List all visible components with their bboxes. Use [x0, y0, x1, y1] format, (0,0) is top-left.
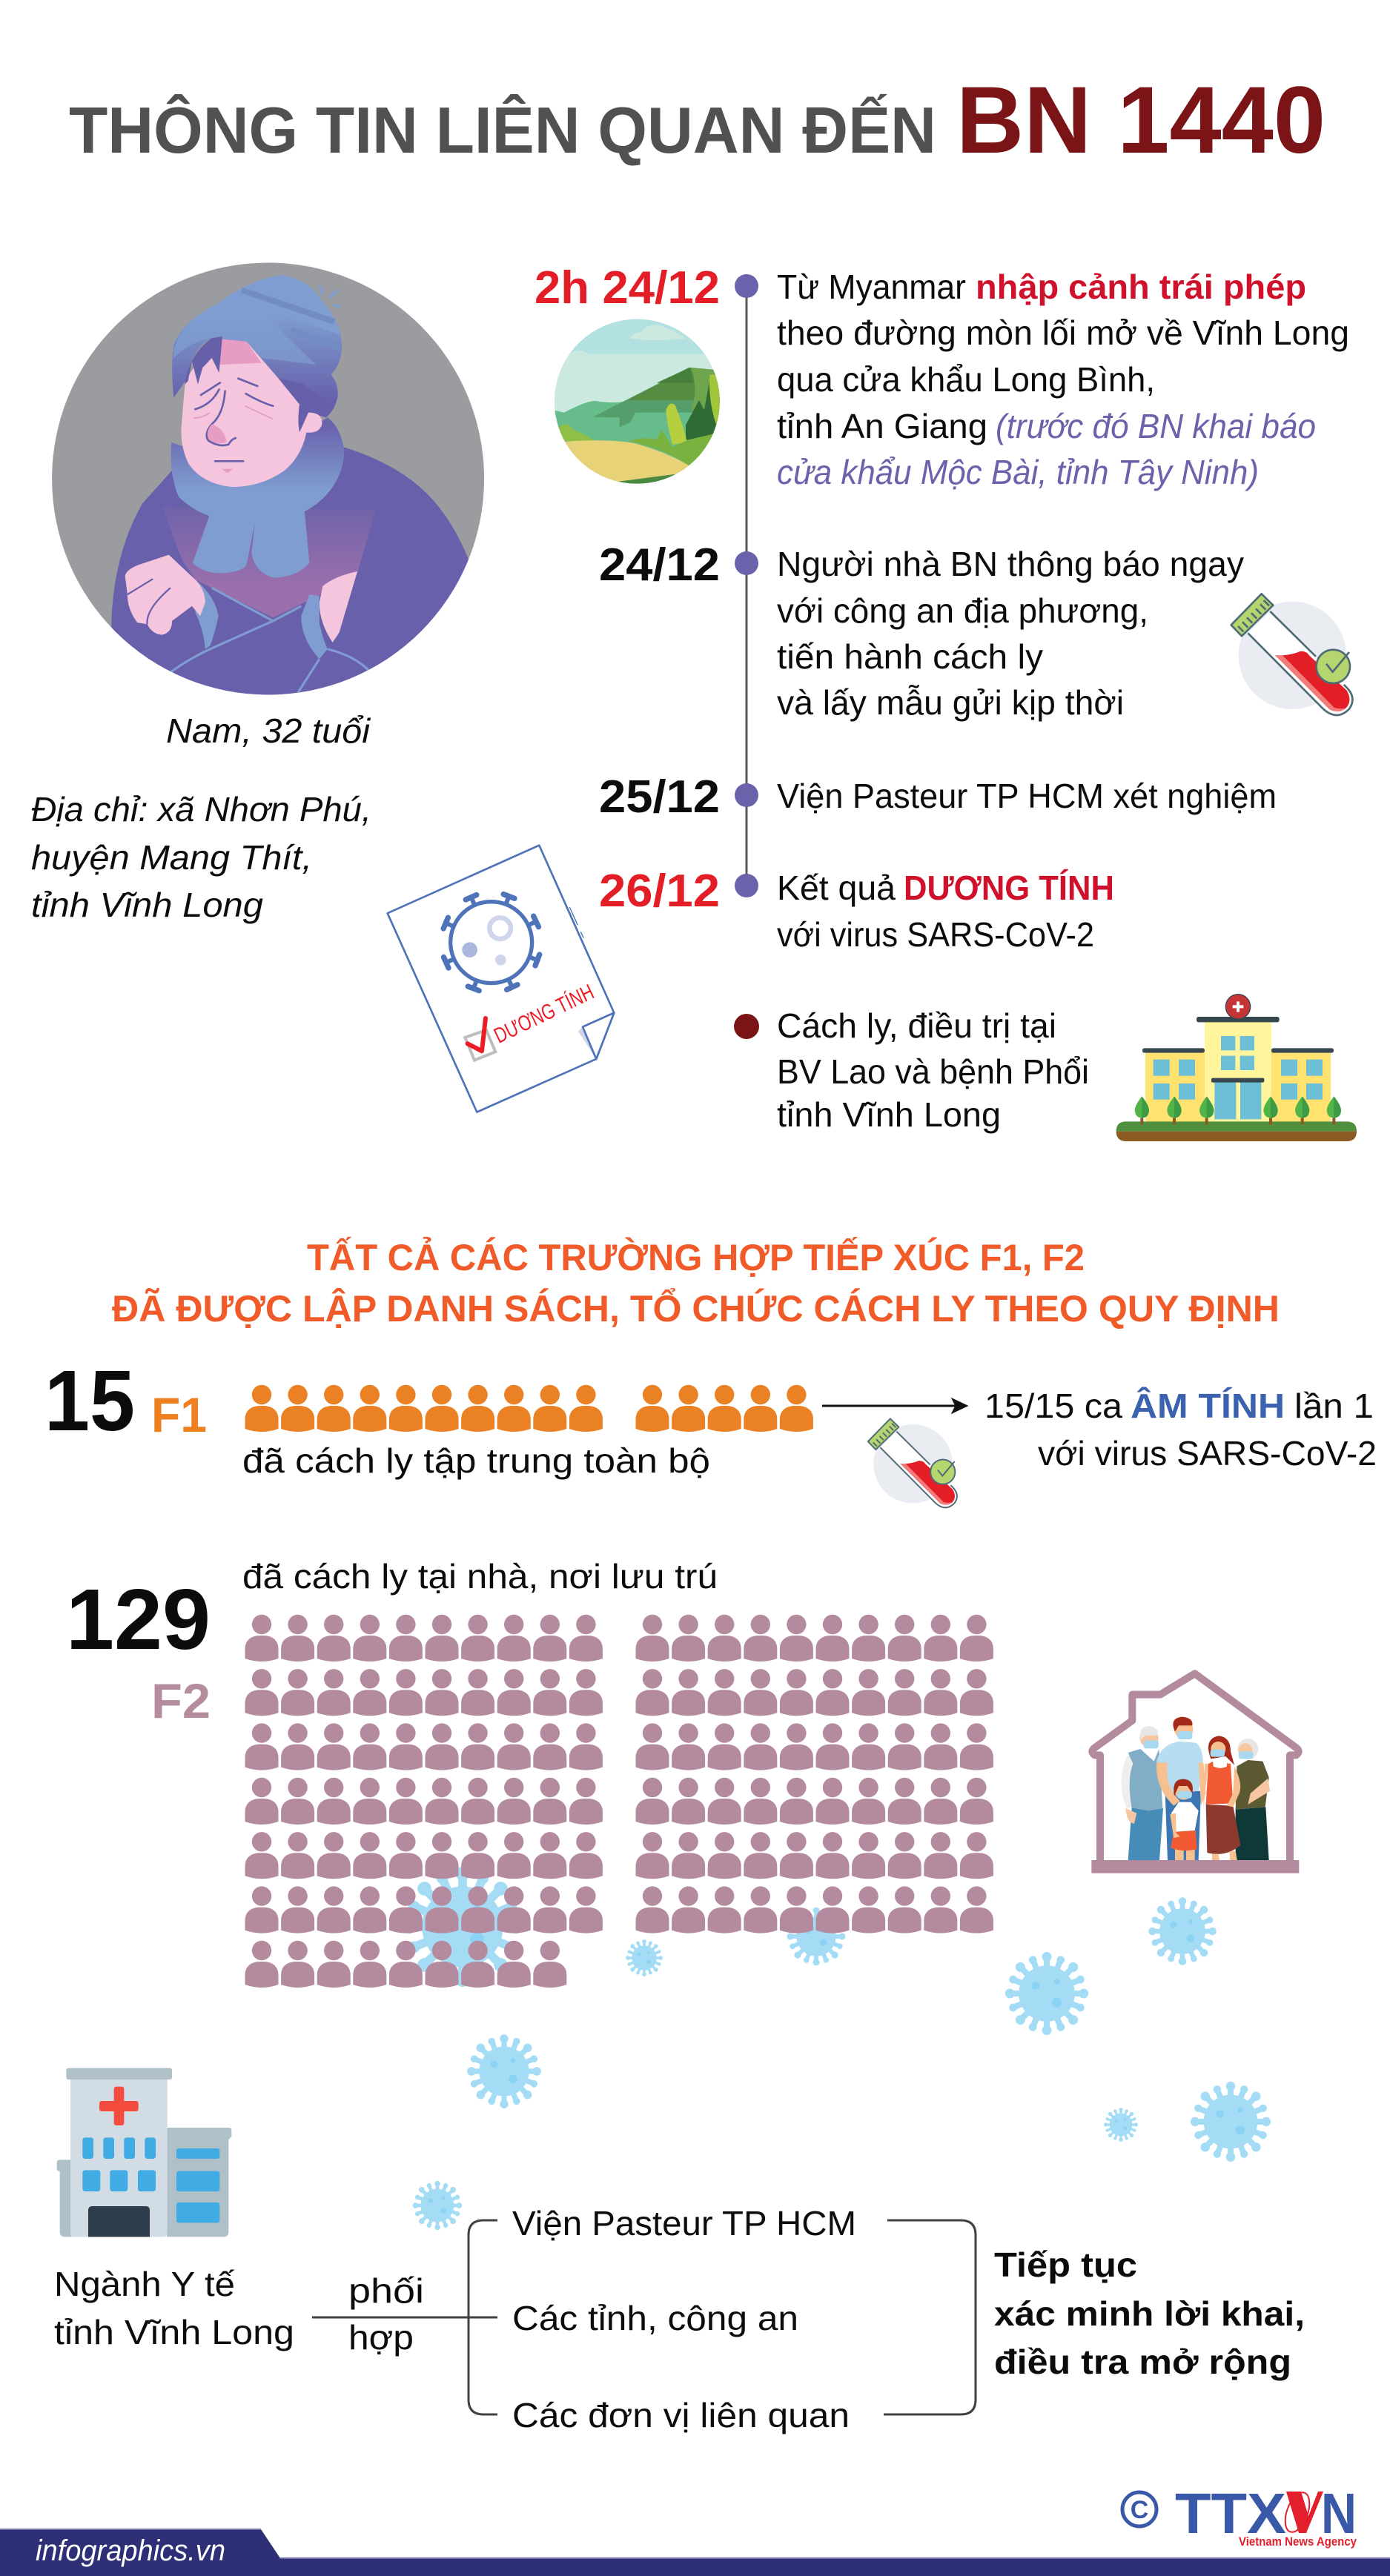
text block: 2h 24/12: theo đường mòn lối mở về Vĩnh Long — [777, 313, 1349, 352]
F1 result — [984, 1387, 1377, 1473]
mother — [1203, 1736, 1240, 1860]
hair — [185, 336, 334, 432]
text block: 26/12: DƯƠNG TÍNH — [904, 869, 1114, 907]
date: 2h 24/12: 2h 24/12 — [535, 262, 720, 313]
logo: TTXVN: N — [1321, 2482, 1357, 2546]
father — [1156, 1717, 1206, 1860]
conclusion text — [994, 2245, 1305, 2381]
heading: contacts: ĐÃ ĐƯỢC LẬP DANH SÁCH, TỔ CHỨC CÁCH LY THEO QUY ĐỊNH — [112, 1287, 1280, 1330]
text: provincial health sector: Ngành Y tế — [54, 2265, 235, 2303]
conclusion text: điều tra mở rộng — [994, 2343, 1291, 2381]
partners list: Viện Pasteur TP HCM — [512, 2204, 856, 2243]
F1 count: F1 — [151, 1387, 207, 1442]
icon: positive test document: DƯƠNG TÍNH — [490, 980, 598, 1049]
right bracket — [884, 2220, 976, 2414]
F2 count: 129 — [66, 1571, 211, 1667]
icon: family in house — [1091, 1673, 1299, 1873]
face — [181, 337, 308, 487]
logo: TTXVN: C — [1131, 2496, 1148, 2524]
date: 26/12: 26/12 — [599, 866, 720, 917]
sweat marks — [319, 284, 342, 308]
ear — [299, 413, 322, 433]
F2 count — [66, 1571, 211, 1728]
text block: 24/12 — [777, 545, 1244, 722]
text block: 2h 24/12: cửa khẩu Mộc Bài, tỉnh Tây Ninh) — [777, 453, 1259, 491]
chest panel — [162, 507, 376, 617]
timeline dots — [734, 274, 759, 1039]
F2 people pictogram — [245, 1615, 993, 1988]
F1 result: với virus SARS-CoV-2 — [1038, 1434, 1377, 1473]
arrow — [822, 1400, 966, 1412]
F1 count: 15 — [44, 1352, 135, 1449]
text block: 2h 24/12: nhập cảnh trái phép — [976, 268, 1306, 306]
text: coordinate with: hợp — [348, 2318, 414, 2357]
facial features — [195, 379, 273, 461]
jacket — [111, 448, 469, 695]
hat — [172, 275, 342, 417]
illustration: sick man portrait — [52, 262, 497, 719]
text block: 2h 24/12: qua cửa khẩu Long Bình, — [777, 360, 1155, 399]
title — [69, 67, 1326, 173]
text block: 26/12: Kết quả — [777, 869, 896, 907]
F1 result: 15/15 ca — [984, 1387, 1122, 1425]
partners list — [512, 2204, 856, 2434]
conclusion text: xác minh lời khai, — [994, 2294, 1305, 2333]
text block: 2h 24/12: (trước đó BN khai báo — [996, 407, 1316, 445]
footer site name: infographics.vn — [36, 2534, 225, 2567]
footer bar — [0, 2529, 1390, 2576]
partners list: Các tỉnh, công an — [512, 2299, 798, 2337]
text block: 24/12: Người nhà BN thông báo ngay — [777, 545, 1244, 583]
F1 count — [44, 1352, 207, 1449]
text block: 24/12: với công an địa phương, — [777, 591, 1148, 630]
scarf tails — [193, 510, 309, 578]
logo: TTXVN — [1122, 2482, 1357, 2549]
text block: 2h 24/12: Từ Myanmar — [777, 268, 966, 306]
text block: treatment — [777, 1006, 1089, 1134]
address text: tỉnh Vĩnh Long — [31, 886, 263, 924]
illustration: landscape — [553, 317, 723, 489]
text: provincial health sector: tỉnh Vĩnh Long — [54, 2313, 294, 2351]
F2 count: F2 — [151, 1673, 211, 1728]
logo: TTXVN: Vietnam News Agency — [1239, 2534, 1357, 2549]
address text: Địa chỉ: xã Nhơn Phú, — [31, 790, 371, 829]
grandfather — [1121, 1726, 1163, 1860]
text block: 26/12 — [777, 869, 1114, 954]
text: coordinate with — [348, 2271, 424, 2357]
right forearm — [320, 571, 357, 643]
text block: treatment: tỉnh Vĩnh Long — [777, 1095, 1001, 1134]
F1 result: ÂM TÍNH — [1131, 1387, 1285, 1425]
child — [1170, 1779, 1199, 1860]
heading: contacts — [112, 1237, 1280, 1330]
conclusion text: Tiếp tục — [994, 2245, 1137, 2284]
icon: hospital with trees — [1116, 995, 1357, 1141]
date: 24/12: 24/12 — [599, 540, 720, 591]
background viruses — [403, 1867, 1271, 2230]
left bracket connector — [312, 2220, 497, 2414]
timeline line — [746, 286, 747, 886]
title: BN 1440 — [956, 67, 1326, 173]
text block: treatment: BV Lao và bệnh Phổi — [777, 1052, 1089, 1091]
grandmother — [1236, 1739, 1270, 1860]
F2 description: đã cách ly tại nhà, nơi lưu trú — [242, 1557, 718, 1596]
address text — [31, 790, 371, 924]
F1 people pictogram — [245, 1385, 813, 1432]
heading: contacts: TẤT CẢ CÁC TRƯỜNG HỢP TIẾP XÚC F1, F2 — [307, 1237, 1085, 1278]
text block: 24/12: và lấy mẫu gửi kịp thời — [777, 683, 1124, 722]
partners list: Các đơn vị liên quan — [512, 2396, 850, 2434]
hat flop — [173, 329, 316, 365]
icon: test tube small — [868, 1418, 957, 1507]
icon: hospital building — [57, 2068, 231, 2237]
text: coordinate with: phối — [348, 2271, 424, 2310]
jacket trim — [195, 580, 328, 659]
icon: positive test document — [388, 846, 614, 1112]
text block: treatment: Cách ly, điều trị tại — [777, 1006, 1056, 1045]
F1 description: đã cách ly tập trung toàn bộ — [242, 1441, 710, 1480]
caption: sex and age: Nam, 32 tuổi — [166, 711, 371, 750]
text: provincial health sector — [54, 2265, 294, 2351]
text block: 2h 24/12: tỉnh An Giang — [777, 407, 987, 445]
text block: 26/12: với virus SARS-CoV-2 — [777, 915, 1094, 954]
text: 25/12: Viện Pasteur TP HCM xét nghiệm — [777, 777, 1277, 815]
date: 25/12: 25/12 — [599, 771, 720, 823]
title: THÔNG TIN LIÊN QUAN ĐẾN — [69, 93, 936, 167]
F1 result: lần 1 — [1294, 1387, 1374, 1425]
text block: 2h 24/12 — [777, 268, 1349, 491]
text block: 24/12: tiến hành cách ly — [777, 637, 1043, 676]
address text: huyện Mang Thít, — [31, 838, 312, 877]
scarf loop — [171, 417, 344, 524]
icon: test tube — [1231, 594, 1353, 715]
logo: TTXVN: TTX — [1175, 2482, 1286, 2546]
left hand — [125, 555, 205, 635]
